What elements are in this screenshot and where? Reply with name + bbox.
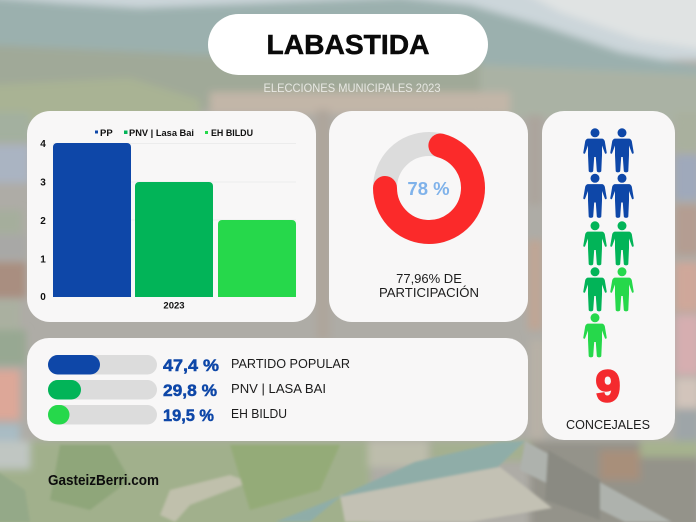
y axis labels: 1 bbox=[40, 254, 46, 266]
panel: councillors bbox=[542, 111, 675, 440]
y axis labels: 4 bbox=[40, 139, 46, 150]
bar: EH Bildu 2 bbox=[218, 220, 296, 297]
y axis labels: 3 bbox=[40, 178, 46, 188]
y axis labels: 0 bbox=[40, 292, 46, 303]
grid lines bbox=[53, 144, 296, 220]
row: Partido Popular bbox=[48, 355, 350, 375]
donut value: 78 % bbox=[407, 178, 450, 199]
row: PNV bbox=[48, 380, 326, 400]
chart legend: EH BILDU bbox=[211, 128, 253, 139]
row: Partido Popular: PARTIDO POPULAR bbox=[231, 356, 350, 371]
seat caption: CONCEJALES bbox=[566, 417, 650, 432]
donut chart bbox=[385, 144, 473, 232]
row: Partido Popular: 47,4 % bbox=[163, 356, 219, 375]
row: EH Bildu: EH BILDU bbox=[231, 406, 287, 421]
row: EH Bildu bbox=[48, 405, 287, 425]
panel: participation bbox=[329, 111, 528, 322]
bar: PP 4 bbox=[53, 143, 131, 297]
subtitle: ELECCIONES MUNICIPALES 2023 bbox=[264, 83, 440, 95]
x axis label: 2023 bbox=[163, 300, 185, 312]
pictogram: 9 councillors bbox=[583, 128, 634, 357]
chart legend: PNV | Lasa Bai bbox=[129, 128, 194, 139]
y axis labels: 2 bbox=[40, 216, 46, 227]
chart legend bbox=[95, 128, 253, 139]
bar: PNV 3 bbox=[135, 182, 213, 297]
title pill bbox=[208, 14, 488, 75]
brand logo text: GasteizBerri.com bbox=[48, 473, 159, 489]
chart legend: PP bbox=[100, 128, 113, 139]
row: EH Bildu: 19,5 % bbox=[163, 406, 214, 425]
y axis labels bbox=[40, 139, 46, 303]
participation caption: PARTICIPACIÓN bbox=[379, 285, 479, 300]
title: LABASTIDA bbox=[266, 29, 430, 60]
participation caption bbox=[379, 271, 479, 300]
seat total: 9 bbox=[596, 362, 620, 411]
participation caption: 77,96% DE bbox=[396, 271, 462, 286]
row: PNV: PNV | LASA BAI bbox=[231, 381, 326, 396]
panel: vote share bbox=[27, 338, 528, 441]
row: PNV: 29,8 % bbox=[163, 381, 217, 400]
panel: seats bar chart bbox=[27, 111, 316, 322]
